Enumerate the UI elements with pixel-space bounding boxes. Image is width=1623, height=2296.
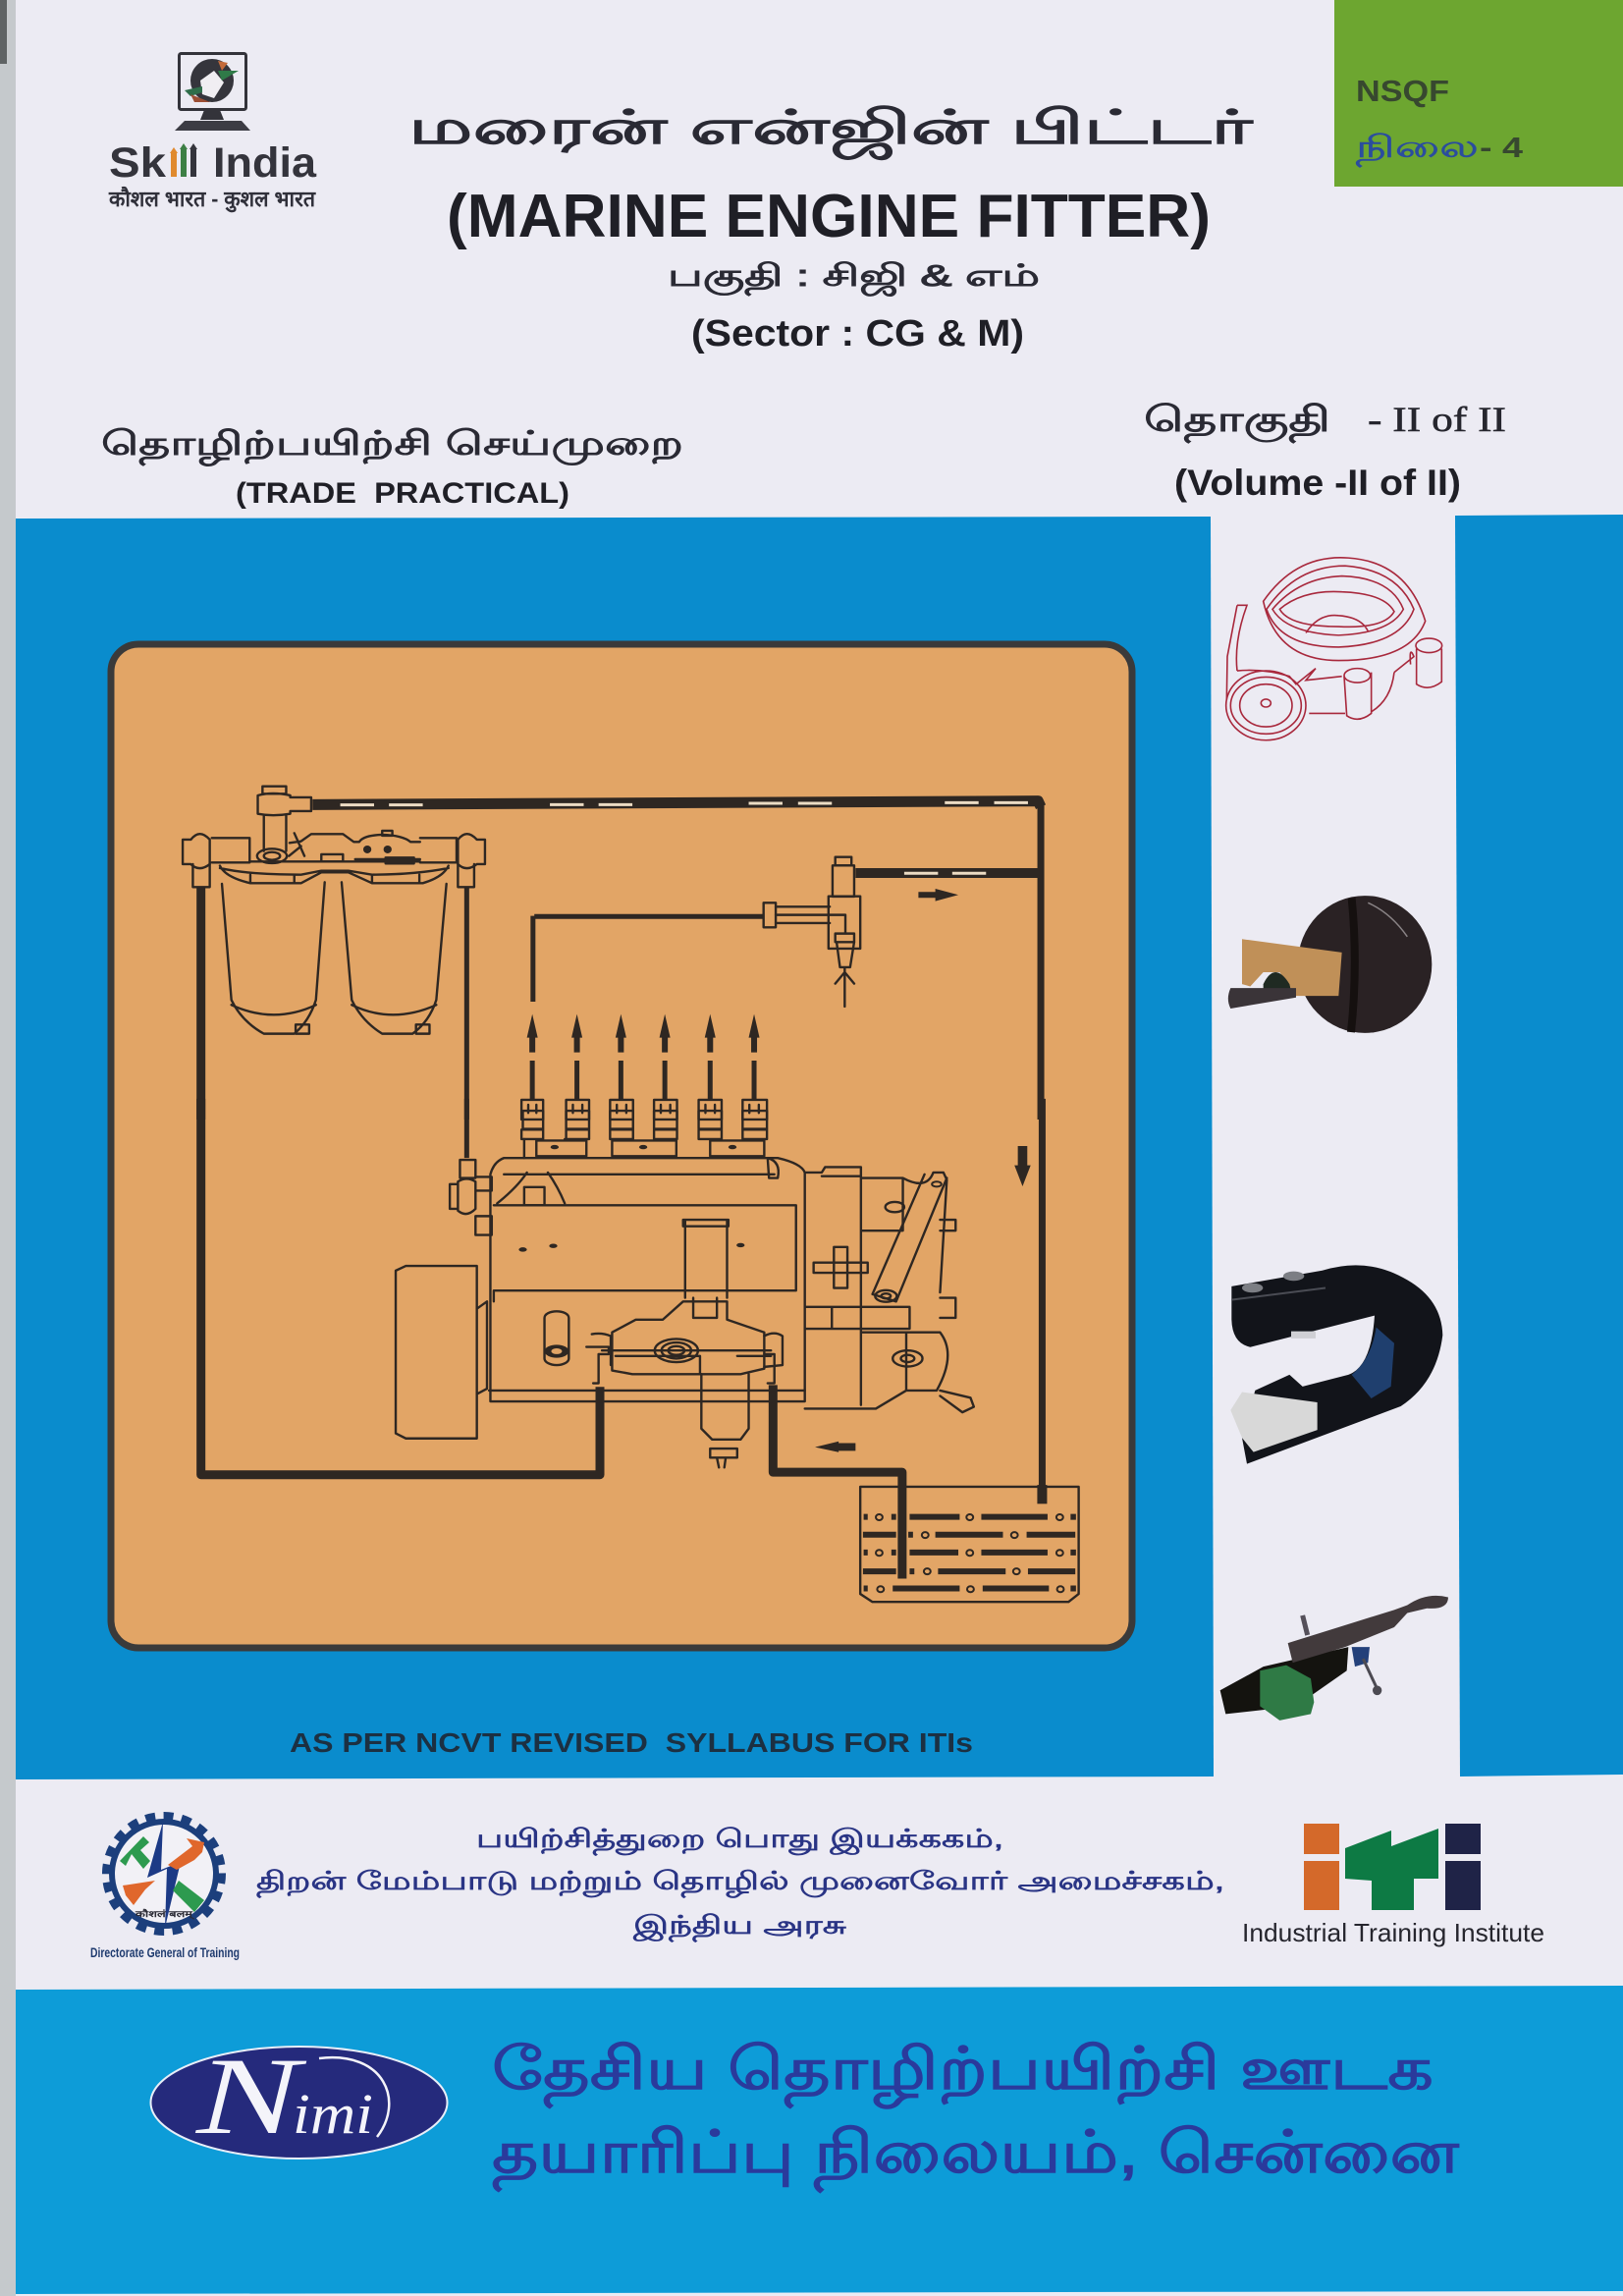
delivery nuts — [521, 1100, 767, 1120]
syllabus note: AS PER NCVT REVISED SYLLABUS FOR ITIs — [290, 1727, 973, 1758]
pipe: injector branch — [855, 868, 1040, 878]
icon: red line drawing of pump casing — [1226, 558, 1442, 740]
NIMI logo: N — [195, 2036, 306, 2158]
fuel tank — [860, 1487, 1079, 1602]
feed pump with filter — [586, 1220, 783, 1467]
trade practical: English: (TRADE PRACTICAL) — [236, 477, 569, 510]
governor pulley — [396, 1266, 487, 1439]
NSQF label: NSQF — [1356, 74, 1449, 108]
title: Tamil: மரைன் என்ஜின் பிட்டர் — [408, 102, 1253, 159]
pipe: right line — [1038, 805, 1045, 1120]
ITI caption: Industrial Training Institute — [1242, 1918, 1544, 1947]
ministry text block — [256, 1824, 1224, 1941]
oblong port — [545, 1311, 568, 1365]
engine diagram panel — [111, 644, 1132, 1648]
ministry text block: திறன் மேம்பாடு மற்றும் தொழில் முனைவோர் அமைச்சகம், — [256, 1866, 1224, 1897]
Skill India logo — [108, 53, 317, 213]
icon: ITI mark — [1304, 1824, 1481, 1910]
pipes: continuation — [201, 1099, 600, 1475]
NIMI logo — [151, 2036, 448, 2159]
ministry text block: இந்திய அரசு — [633, 1910, 846, 1941]
sector: Tamil: பகுதி : சிஜி & எம் — [668, 258, 1040, 296]
ministry text block: பயிற்சித்துறை பொது இயக்ககம், — [476, 1824, 1003, 1855]
pipe: high pressure line — [534, 914, 764, 919]
trade practical: Tamil: தொழிற்பயிற்சி செய்முறை — [101, 425, 683, 465]
NIMI logo: imi — [293, 2082, 373, 2146]
icon: green clamp vice — [1220, 1596, 1448, 1721]
blue panel: right strip — [1455, 515, 1623, 1777]
delivery valve holders — [521, 1111, 767, 1158]
blue panel: main — [16, 517, 1214, 1779]
volume: English: (Volume -II of II) — [1174, 463, 1461, 503]
volume: Tamil: தொகுதி — [1144, 399, 1330, 443]
volume: Tamil — [1144, 399, 1506, 443]
injection pump body — [450, 1158, 974, 1412]
fuel system upper part — [183, 787, 1041, 1120]
icon: chuck with wooden block — [1228, 896, 1432, 1033]
Skill India wordmark — [109, 139, 317, 187]
DGT caption: Directorate General of Training — [90, 1944, 240, 1960]
institute name line 2: தயாரிப்பு நிலையம், சென்னை — [492, 2119, 1459, 2193]
title: English: (MARINE ENGINE FITTER) — [447, 183, 1211, 250]
level label — [1356, 130, 1523, 168]
icon: gear emblem — [106, 1816, 222, 1932]
pipe: top return line — [312, 801, 1041, 807]
arrow: left — [815, 1442, 855, 1452]
green level badge — [1334, 0, 1623, 187]
sector: English: (Sector : CG & M) — [691, 313, 1024, 355]
institute name line 1: தேசிய தொழிற்பயிற்சி ஊடக — [492, 2036, 1434, 2108]
fuel system lower part — [201, 1099, 1079, 1602]
Hindi tagline: कौशल भारत - कुशल भारत — [108, 186, 316, 213]
fuel filter — [183, 787, 485, 1034]
volume: Tamil: - II of II — [1368, 400, 1506, 439]
level label: நிலை — [1356, 130, 1479, 168]
Skill India wordmark: Sk — [109, 139, 166, 187]
blue panel: footer — [16, 1986, 1623, 2294]
six delivery arrows — [527, 1014, 760, 1100]
icon: monitor — [175, 53, 250, 131]
injector — [764, 857, 860, 1007]
arrow: right — [918, 889, 958, 902]
ITI logo — [1242, 1824, 1544, 1947]
DGT logo — [90, 1816, 240, 1960]
Skill India wordmark: India — [213, 139, 317, 187]
level label: - 4 — [1480, 133, 1523, 164]
arrow: down — [1014, 1146, 1031, 1186]
pipe: left feed lines — [196, 887, 205, 1120]
icon: U-shaped gauge — [1230, 1265, 1442, 1464]
icon: gear emblem: कौशलं बलम् — [135, 1908, 195, 1920]
